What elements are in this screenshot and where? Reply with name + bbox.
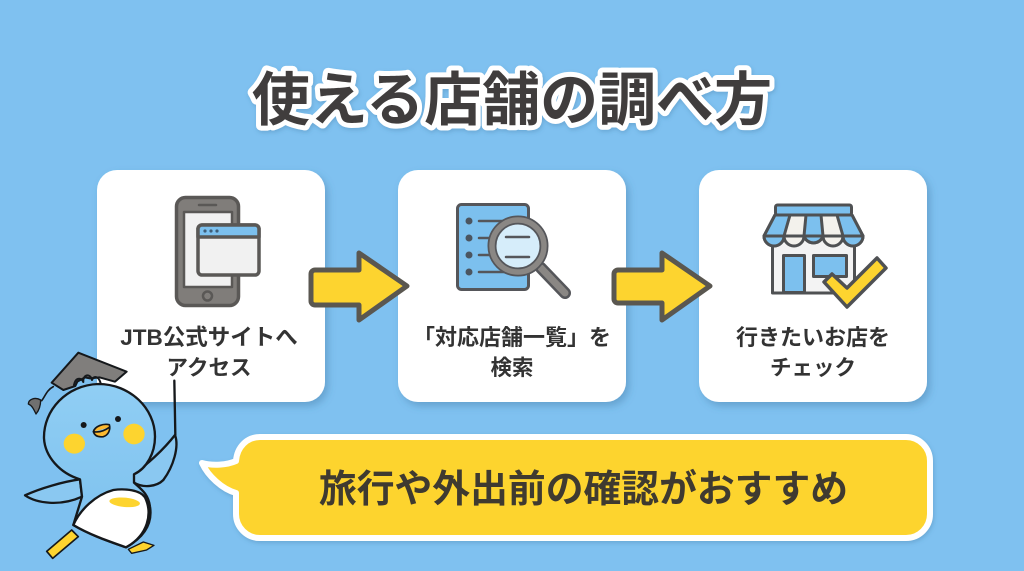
icon: storefront with check mark: [764, 205, 886, 307]
panel: step 1: [97, 170, 325, 402]
title: 使える店舗の調べ方: [252, 68, 772, 133]
cheeks: [64, 434, 85, 454]
arrow: step 2 to step 3: [614, 253, 710, 320]
mascot: blue bird with graduation cap: [25, 353, 176, 558]
cap board: [52, 353, 127, 390]
icon: list with magnifying glass: [458, 204, 565, 293]
callout text: 旅行や外出前の確認がおすすめ: [319, 469, 848, 511]
right wing: [133, 435, 176, 486]
callout: [202, 437, 930, 538]
panel: step 2: [398, 170, 626, 402]
belly mark: [109, 496, 140, 508]
cap tassel: [42, 387, 53, 401]
step 2 label: 「対応店舗一覧」を: [413, 325, 611, 350]
step 1 label: JTB公式サイトへ: [120, 325, 298, 350]
panel: step 2: 検索: [490, 356, 534, 380]
icon: smartphone with browser window: [176, 198, 259, 306]
step 3 label: 行きたいお店を: [736, 325, 890, 350]
pointer stick: [174, 381, 175, 435]
eyes: [81, 422, 87, 428]
arrow: step 1 to step 2: [311, 253, 407, 320]
panel: step 3: チェック: [770, 356, 856, 380]
body and head: [44, 384, 155, 547]
panel: step 1: アクセス: [167, 356, 251, 380]
beak: [93, 424, 110, 437]
left wing: [25, 479, 82, 503]
panel: step 3: [699, 170, 927, 402]
leg and foot: [47, 530, 78, 558]
hair tuft: [74, 375, 101, 385]
white belly: [73, 489, 148, 547]
